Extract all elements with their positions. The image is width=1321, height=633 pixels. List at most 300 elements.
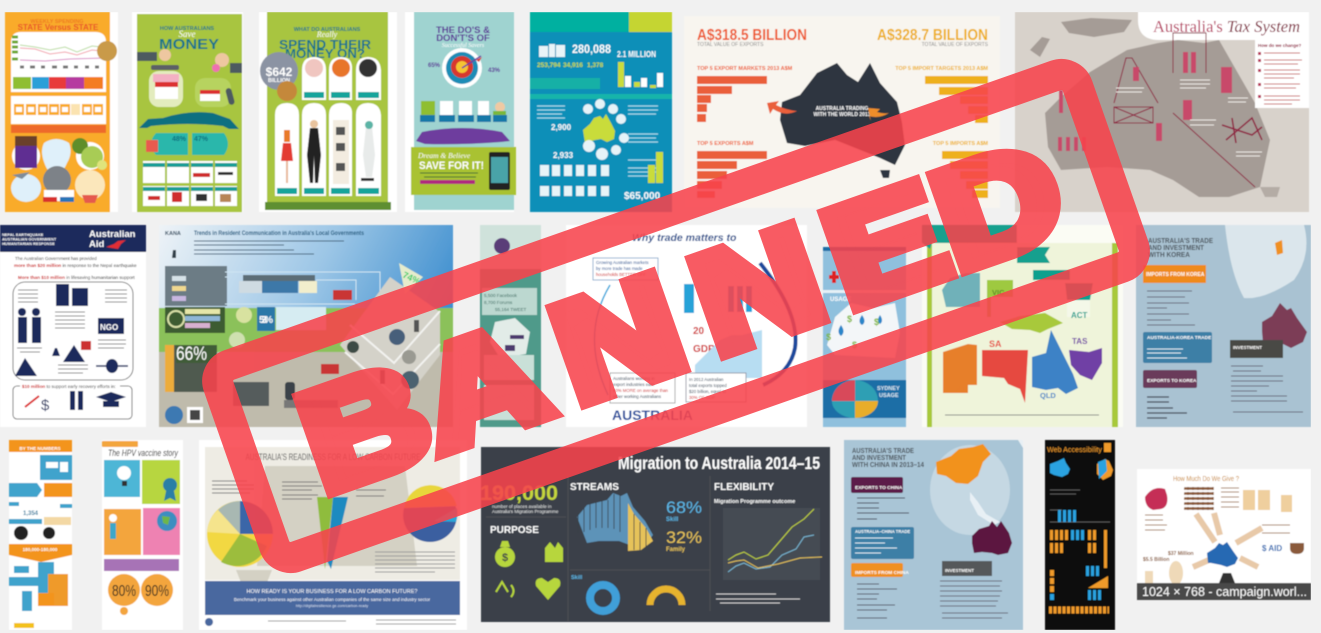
target chart	[442, 48, 482, 88]
list: exports	[1147, 397, 1187, 418]
callout: services: In 2012 Australian	[689, 377, 724, 382]
icon: people	[545, 542, 563, 562]
humanitarian box	[13, 282, 133, 380]
top row cards	[302, 57, 381, 100]
label: sa: SA	[989, 339, 1002, 349]
text lines	[1145, 488, 1290, 533]
water drops	[838, 315, 882, 336]
caption: program: Australia's Migration Programme	[492, 509, 559, 514]
recovery box	[13, 383, 132, 419]
state: nsw	[1000, 313, 1063, 333]
icon: money bag: $	[502, 552, 508, 564]
usage heading: USAGE	[830, 297, 851, 303]
divider block	[486, 476, 710, 621]
gauge	[650, 589, 682, 605]
funding headline: More than $10 million in lifesaving humanitarian support	[18, 275, 135, 280]
aid label: $ AID	[1262, 544, 1282, 553]
heading: really: Really	[316, 30, 338, 39]
hands	[137, 49, 242, 73]
channel box	[239, 275, 317, 293]
recovery box: $	[41, 397, 50, 414]
heading: money: MONEY	[159, 36, 219, 53]
grey caption	[284, 400, 338, 408]
orange people rows	[1050, 530, 1107, 592]
ribbon	[1017, 247, 1050, 263]
face icon	[43, 527, 55, 539]
coin stacks	[648, 152, 663, 183]
footer logos	[14, 623, 34, 628]
industry icons	[540, 165, 609, 196]
se asia	[970, 440, 1023, 525]
green card: ribbon	[142, 460, 180, 504]
dot map of australia	[577, 493, 653, 551]
state footnote	[945, 414, 1099, 416]
dark box: investment	[942, 561, 992, 576]
map caption second line: WITH THE WORLD 2013	[814, 112, 871, 118]
map of asia	[1061, 18, 1132, 37]
figure	[172, 250, 176, 258]
heading: exports total: A$318.5 BILLION	[697, 27, 807, 44]
ribbon	[139, 112, 239, 129]
teal stat cards	[146, 133, 228, 155]
illustration: slope line	[1173, 113, 1255, 187]
sydney usage subtitle: USAGE	[879, 393, 899, 399]
panel: tourism economic infographic	[530, 12, 672, 212]
blue map overlay	[1098, 459, 1107, 479]
weekly amounts strip	[11, 96, 106, 124]
globe	[165, 406, 183, 424]
heading	[1148, 236, 1213, 259]
text blocks	[537, 106, 658, 176]
panel: australia's trade and investment with korea	[1136, 225, 1311, 427]
orange fence	[44, 517, 71, 525]
blue box: trade: AUSTRALIA–CHINA TRADE	[855, 529, 910, 534]
heading: AND INVESTMENT	[852, 455, 907, 462]
icon grid	[143, 161, 237, 206]
save for it panel: SAVE FOR IT!	[419, 160, 484, 172]
report text	[375, 552, 455, 572]
section band	[530, 94, 672, 99]
heading: successful savers: Successful Savers	[442, 42, 485, 49]
icon: heart	[536, 578, 560, 600]
stat 43 percent: 43%	[488, 68, 501, 74]
red tag	[333, 290, 352, 300]
australia map	[780, 63, 905, 165]
pale stat blocks	[484, 355, 534, 420]
stat: 1,354	[23, 511, 39, 517]
circle: 80 percent: 80%	[112, 583, 136, 600]
panel: how much do we give	[1137, 469, 1311, 600]
save for it panel	[411, 147, 516, 195]
header text: AUSTRALIAN GOVERNMENT	[2, 236, 57, 242]
yellow stats: 34,916	[563, 62, 583, 69]
pale stat box	[482, 288, 537, 315]
heading: save: Save	[178, 29, 196, 39]
blue box: trade: AUSTRALIA-KOREA TRADE	[1147, 335, 1212, 341]
purple box: exports	[851, 477, 903, 493]
orange band	[9, 544, 72, 562]
donut chart	[590, 585, 616, 611]
blue box	[233, 382, 269, 406]
state: western australia	[942, 273, 980, 307]
heading: How Much Do We Give ?	[1173, 474, 1239, 483]
teal stat cards: 48%	[172, 136, 187, 143]
header text: HUMANITARIAN RESPONSE	[2, 241, 55, 246]
panel: migration to australia	[480, 447, 830, 622]
line chart	[723, 508, 822, 580]
map	[490, 318, 530, 358]
logo box	[1104, 443, 1111, 452]
blue box: trade	[1143, 332, 1212, 363]
cityscape	[695, 330, 762, 378]
circle: 90 percent: 90%	[145, 583, 169, 600]
heading: top import markets: TOP 5 IMPORT TARGETS 2013 A$M	[895, 66, 988, 72]
label: skill section: Skill	[571, 575, 583, 581]
top band	[530, 12, 629, 32]
purple box: exports	[1143, 370, 1197, 388]
purple band	[104, 559, 179, 571]
heading: WITH CHINA IN 2013–14	[852, 462, 924, 469]
icon: tools	[496, 582, 514, 597]
grey text	[1050, 490, 1110, 522]
dollar signs: $	[874, 317, 879, 327]
teal stat cards: 47%	[194, 136, 209, 143]
stat 2,933: 2,933	[553, 151, 574, 160]
stat 2.1 million: 2.1 MILLION	[617, 49, 656, 59]
jar: savers	[149, 65, 183, 107]
panel: the hpv vaccine story	[102, 440, 183, 630]
blue wedge	[327, 497, 348, 569]
map: australia	[1262, 303, 1307, 348]
heading: spend their: SPEND THEIR	[279, 37, 372, 52]
qr code inner	[190, 410, 200, 420]
arrows from australia	[1193, 513, 1262, 567]
sydney usage pie	[832, 380, 878, 418]
yellow stats	[537, 62, 604, 69]
illustration: high corporate tax frame	[1173, 33, 1206, 73]
panel: how australians save money	[132, 12, 243, 212]
blue call to action	[205, 581, 460, 615]
heading: flexibility: FLEXIBILITY	[714, 482, 774, 493]
panel: australia's readiness for a low carbon future	[199, 440, 467, 630]
teal note	[530, 78, 600, 89]
save for it panel: Dream & Believe	[417, 151, 471, 160]
heading: money on: MONEY ON?	[285, 46, 365, 61]
label: nt: NT	[955, 385, 966, 394]
title backing	[1138, 12, 1309, 40]
intro text: The Australian Government has provided	[15, 256, 97, 261]
lime logo box	[629, 12, 672, 32]
icon: gold seal	[97, 41, 117, 61]
footer band	[265, 202, 391, 210]
qr code	[187, 407, 203, 423]
caption: imports: TOTAL VALUE OF EXPORTS	[922, 42, 989, 48]
how do we change list: How do we change?	[1258, 43, 1302, 48]
stat: 66 percent: 66%	[176, 344, 207, 365]
purple globe	[494, 238, 510, 254]
panel: australian aid nepal earthquake	[0, 225, 146, 427]
circle: total billions: $642	[266, 65, 293, 79]
green wedge	[317, 497, 333, 569]
label: tas: TAS	[1072, 337, 1088, 346]
stat: family: 32%	[666, 528, 702, 547]
state: top teal	[1033, 270, 1070, 280]
heading: AUSTRALIA'S TRADE	[852, 448, 914, 455]
blob: vegetables	[72, 138, 107, 170]
blue box: trade	[851, 527, 914, 559]
jar: dreamers	[195, 78, 235, 107]
female symbol	[120, 607, 128, 615]
heading: imports total: A$328.7 BILLION	[877, 27, 988, 44]
shaded asia	[930, 445, 1010, 535]
list: investment	[1231, 366, 1303, 412]
orange wedge	[48, 574, 68, 606]
heading: top imports: TOP 5 IMPORTS A$M	[933, 141, 988, 147]
stat text	[484, 293, 527, 312]
logo: australian aid: Aid	[89, 239, 104, 250]
icon: circle	[236, 307, 252, 323]
top dark strip	[823, 247, 906, 251]
world map dots	[46, 462, 68, 472]
blue call to action: HOW READY IS YOUR BUSINESS FOR A LOW CARBON FUTURE?	[247, 589, 417, 595]
stat text: 5,500 Facebook	[484, 293, 518, 298]
dollar signs: $	[826, 332, 831, 342]
bottom row cards	[275, 103, 381, 196]
state: victoria	[987, 280, 1013, 317]
callout: services: 30% OF GDP	[689, 395, 715, 400]
logo	[205, 618, 213, 626]
highlight: korea	[1275, 240, 1283, 255]
circle: total billions	[260, 52, 298, 90]
notes	[716, 594, 800, 603]
china map	[936, 444, 991, 484]
coffee cup	[1290, 543, 1304, 554]
blue figures	[1058, 510, 1076, 522]
list: imports	[857, 584, 897, 618]
label: skill: Skill	[666, 517, 679, 523]
export bars lower	[697, 151, 767, 198]
panel: australia's tax system	[1015, 12, 1309, 212]
bar chart	[618, 62, 663, 88]
panel: why trade matters to australia	[566, 225, 807, 427]
heading: weekly spending: WEEKLY SPENDING	[30, 19, 84, 25]
heading: what do australians: WHAT DO AUSTRALIANS	[294, 27, 361, 33]
state: tasmania	[1069, 348, 1102, 380]
panel: web accessibility	[1045, 440, 1115, 630]
heading: top exports: TOP 5 EXPORTS A$M	[697, 141, 754, 147]
grass band	[159, 308, 453, 354]
yellow stats: 1,378	[587, 62, 604, 69]
green stat box	[165, 307, 225, 333]
blue arrow	[9, 483, 42, 497]
panel: the do's and don'ts of successful savers	[405, 12, 516, 212]
callout: exports: export industries earn	[613, 382, 655, 387]
connector lines	[225, 272, 380, 304]
heading: streams: STREAMS	[570, 482, 619, 493]
stat 2,900: 2,900	[551, 123, 572, 132]
sydney usage panel	[823, 380, 906, 418]
blue world map card	[40, 455, 72, 480]
dark circle	[14, 526, 28, 540]
divider strip	[823, 290, 906, 293]
label: act text: ACT	[1071, 311, 1088, 320]
callout: services: $20 billion, equal to	[689, 389, 727, 394]
triangular stat tag	[399, 263, 423, 294]
blue bar	[9, 519, 42, 524]
pie right	[403, 485, 457, 542]
stat: 180,000-180,000	[23, 547, 58, 552]
logo: kana: KANA	[165, 231, 181, 237]
map of sumatra	[1030, 37, 1050, 57]
logo: australian aid: Australian	[89, 229, 136, 240]
amount: million: $37 Million	[1168, 551, 1194, 557]
ground	[159, 352, 453, 427]
bottom bowl	[236, 570, 272, 587]
stat text: 55,164 TWEET	[495, 307, 527, 312]
heading: Web Accessibility	[1047, 445, 1102, 454]
heading: WITH KOREA	[1148, 250, 1190, 259]
text lines	[212, 481, 386, 499]
stat: places: 190,000	[480, 482, 558, 505]
how do we change list	[1255, 40, 1309, 108]
label: vic: VIC	[992, 288, 1005, 297]
arc	[594, 285, 610, 395]
stat: 53 percent	[257, 307, 326, 331]
heading: Why trade matters to	[632, 232, 737, 244]
grey backdrop shape	[257, 466, 417, 566]
state: south australia	[982, 350, 1028, 403]
illustration: scribble	[1222, 118, 1262, 143]
heading: AND INVESTMENT	[1148, 243, 1204, 252]
blue people rows	[1050, 530, 1101, 600]
footer lines	[268, 620, 456, 624]
list: imports	[1147, 291, 1195, 325]
tap	[9, 502, 72, 508]
header text	[2, 232, 57, 246]
subheading lines	[194, 241, 344, 254]
caption bar	[1137, 583, 1311, 600]
import bars lower	[942, 151, 988, 198]
baskets	[1243, 490, 1292, 512]
caption text: 1024 × 768 - campaign.worl...	[1142, 585, 1307, 599]
blob: dental	[42, 139, 71, 175]
blue tanks	[9, 562, 54, 611]
quote box: households BETTER OFF	[596, 272, 646, 277]
quote box: Growing Australian markets	[596, 260, 649, 265]
server icon	[285, 382, 295, 400]
dark box: investment: INVESTMENT	[945, 568, 974, 573]
buildings icon	[539, 44, 565, 57]
orange box: imports: IMPORTS FROM CHINA	[855, 570, 909, 576]
dollar signs: $	[852, 340, 857, 350]
pie left	[207, 501, 273, 567]
map tasmania	[880, 170, 890, 178]
top banner	[922, 225, 1017, 249]
heading: state versus state: STATE Versus STATE	[18, 23, 99, 32]
map caption: AUSTRALIA TRADING	[816, 106, 869, 112]
panel: teal social statistics	[480, 225, 541, 427]
orange box: imports	[851, 563, 909, 577]
heading: top export markets: TOP 5 EXPORT MARKETS 2013 A$M	[697, 66, 793, 72]
callout: exports: Australians working in	[613, 376, 655, 381]
arc right	[760, 263, 796, 385]
panel: water usage	[823, 247, 906, 427]
panel: by the numbers	[9, 440, 72, 630]
pink card: globe	[143, 508, 180, 555]
illustration: falling bosses	[1114, 58, 1158, 103]
logo: australian aid	[89, 229, 136, 250]
caption: exports: TOTAL VALUE OF EXPORTS	[697, 42, 764, 48]
heading	[852, 448, 924, 469]
australia	[972, 521, 1012, 555]
map of australia	[1045, 40, 1270, 197]
purple marks	[505, 335, 524, 351]
callout bar	[11, 125, 106, 133]
orange bottom figures	[1049, 606, 1109, 614]
grey info box	[165, 266, 227, 306]
orange rising bars	[1088, 576, 1108, 588]
orange card: girl	[104, 509, 141, 555]
caption: places: number of places available in	[492, 504, 552, 509]
heading: AUSTRALIA'S TRADE	[1148, 236, 1213, 245]
purple box: exports: EXPORTS TO KOREA	[1147, 378, 1197, 384]
blue call to action: http://digitalresilience.ge.com/carbon-ready	[296, 604, 368, 608]
footer word: AUSTRALIA	[612, 407, 693, 423]
purple ribbon	[416, 128, 510, 144]
dark box: investment: INVESTMENT	[1233, 345, 1262, 350]
arrow: exports	[767, 101, 797, 114]
label: family: Family	[666, 547, 686, 553]
stamp word: BANNED	[281, 111, 1083, 523]
heading: Migration to Australia 2014–15	[618, 453, 820, 473]
purple box: exports: EXPORTS TO CHINA	[855, 485, 903, 491]
callout: services: total exports topped	[689, 383, 727, 388]
dollar signs: $	[847, 314, 852, 324]
list: investment	[940, 581, 1008, 618]
orange box: imports	[1143, 265, 1206, 283]
panel: australia trading with the world	[684, 16, 1000, 208]
stat: gdp percent: 20	[693, 326, 705, 337]
blue map	[1050, 458, 1070, 477]
subheading: Migration Programme outcome	[714, 499, 795, 505]
map of tasmania	[1260, 187, 1280, 197]
map text lines	[1116, 80, 1262, 156]
amount: billion: $5.5 Billion	[1143, 557, 1169, 563]
isometric building	[340, 277, 440, 410]
icon: money bag	[495, 541, 515, 567]
illustration: figures	[1058, 52, 1232, 151]
circle: 90 percent	[141, 574, 173, 606]
callout: exports: other working Australians	[613, 394, 661, 399]
heading: The HPV vaccine story	[108, 448, 178, 458]
circle: 80 percent	[108, 574, 140, 606]
blob: chocolate	[12, 136, 40, 170]
stat $65,000: $65,000	[624, 191, 661, 202]
heading: AUSTRALIA'S READINESS FOR A LOW CARBON FUTURE	[246, 452, 420, 462]
blob: cars	[43, 166, 74, 202]
australia map	[1207, 542, 1238, 567]
asia map	[1225, 225, 1306, 298]
sydney usage title: SYDNEY	[877, 386, 900, 392]
orange block	[44, 483, 72, 497]
recovery box: $10 million to support early recovery efforts in:	[22, 384, 116, 389]
mountain snow	[827, 303, 900, 358]
blue card: lightbulb	[104, 460, 140, 497]
blob: food	[75, 170, 105, 203]
humanitarian box: NGO	[100, 323, 118, 332]
panel: weekly spending state versus state	[5, 12, 118, 212]
panel: australia's trade and investment with china	[844, 440, 1023, 630]
